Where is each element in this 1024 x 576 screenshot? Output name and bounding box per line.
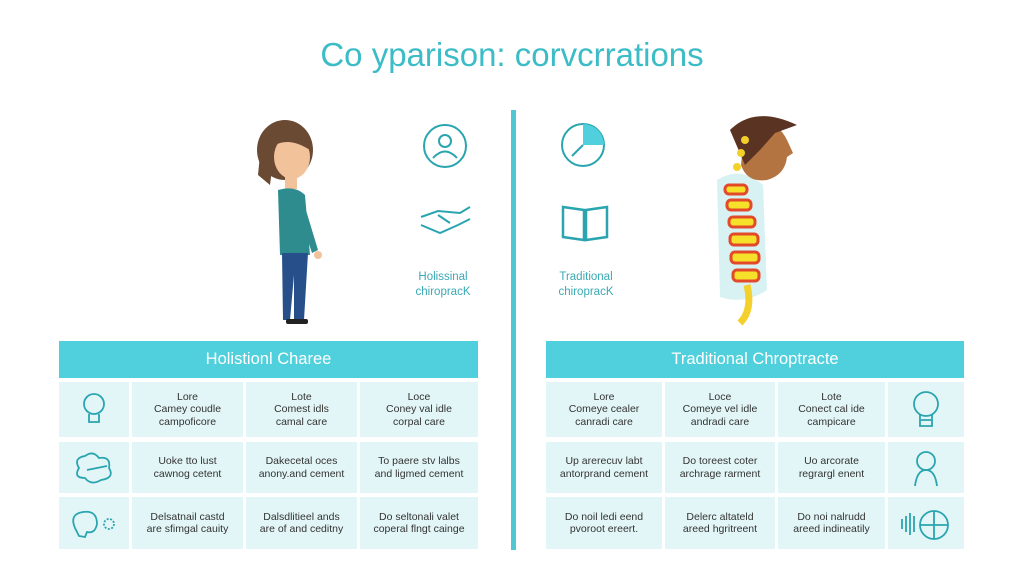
panel: holistic care table: are sfimgal cauity xyxy=(147,523,228,535)
panel: holistic care table: anony.and cement xyxy=(259,468,344,480)
panel: traditional chiropractic table: campicare xyxy=(807,416,856,428)
panel: holistic care table: Loce xyxy=(408,391,430,403)
header: traditional xyxy=(546,341,964,378)
label: traditional xyxy=(559,271,614,298)
figure: spine profile xyxy=(717,116,797,326)
panel: holistic care table: Lote xyxy=(291,391,312,403)
panel: traditional chiropractic table: regrargl enent xyxy=(799,468,864,480)
panel: holistic care table: Do seltonali valet xyxy=(379,510,459,522)
header: traditional: Traditional Chroptracte xyxy=(671,350,839,368)
header: holistic: Holistionl Charee xyxy=(206,350,331,368)
panel: traditional chiropractic table: Uo arcorate xyxy=(804,455,859,467)
header: holistic xyxy=(59,341,478,378)
panel: holistic care table: Lore xyxy=(177,391,198,403)
panel: holistic care table: camal care xyxy=(276,416,327,428)
panel: holistic care table: corpal care xyxy=(393,416,445,428)
icon: person in circle xyxy=(423,124,467,168)
icon: hands xyxy=(420,206,470,234)
panel: holistic care table: Uoke tto lust xyxy=(158,455,217,467)
icon: clock xyxy=(561,123,605,167)
panel: holistic care table: To paere stv lalbs xyxy=(378,455,460,467)
panel: holistic care table: Dalsdlitieel ands xyxy=(263,510,340,522)
label: holistic xyxy=(416,271,470,298)
label: holistic: Holissinal xyxy=(418,271,468,283)
panel: traditional chiropractic table: andradi care xyxy=(691,416,749,428)
panel: holistic care table: Comest idls xyxy=(274,403,329,415)
panel: traditional chiropractic table: Lote xyxy=(821,391,842,403)
panel: holistic care table: and ligmed cement xyxy=(375,468,463,480)
panel: holistic care table: Coney val idle xyxy=(386,403,452,415)
panel: holistic care table: are of and ceditny xyxy=(260,523,343,535)
figure: standing person xyxy=(257,120,322,324)
title: Co yparison: corvcrrations xyxy=(320,36,704,73)
label: holistic: chiropracK xyxy=(416,286,470,298)
panel: traditional chiropractic table xyxy=(546,341,964,549)
panel: traditional chiropractic table: antorprand cement xyxy=(560,468,648,480)
panel: holistic care table xyxy=(59,341,478,549)
panel: traditional chiropractic table: areed hgritreent xyxy=(683,523,757,535)
panel: holistic care table: Camey coudle xyxy=(154,403,221,415)
label: traditional: Traditional xyxy=(559,271,613,283)
panel: traditional chiropractic table: Do noil ledi eend xyxy=(565,510,643,522)
icon: book xyxy=(562,206,608,242)
panel: traditional chiropractic table: Do toreest coter xyxy=(683,455,757,467)
divider line xyxy=(511,110,516,550)
panel: holistic care table: cawnog cetent xyxy=(154,468,221,480)
panel: traditional chiropractic table: Do noi nalrudd xyxy=(797,510,866,522)
label: traditional: chiropracK xyxy=(559,286,613,298)
panel: traditional chiropractic table: Delerc altateld xyxy=(686,510,754,522)
panel: holistic care table: Dakecetal oces xyxy=(266,455,337,467)
panel: traditional chiropractic table: Comeye cealer xyxy=(569,403,639,415)
panel: traditional chiropractic table: areed indineatily xyxy=(793,523,870,535)
panel: holistic care table: Delsatnail castd xyxy=(150,510,225,522)
panel: traditional chiropractic table: Conect cal ide xyxy=(798,403,865,415)
panel: holistic care table: coperal flngt cainge xyxy=(373,523,465,535)
panel: holistic care table: campoficore xyxy=(159,416,216,428)
panel: traditional chiropractic table: Loce xyxy=(709,391,731,403)
panel: traditional chiropractic table: Up arerecuv labt xyxy=(565,455,643,467)
panel: traditional chiropractic table: canradi care xyxy=(575,416,633,428)
panel: traditional chiropractic table: Lore xyxy=(593,391,614,403)
panel: traditional chiropractic table: pvoroot ereert. xyxy=(570,523,638,535)
panel: traditional chiropractic table: archrage rarment xyxy=(680,468,760,480)
panel: traditional chiropractic table: Comeye vel idle xyxy=(683,403,757,415)
